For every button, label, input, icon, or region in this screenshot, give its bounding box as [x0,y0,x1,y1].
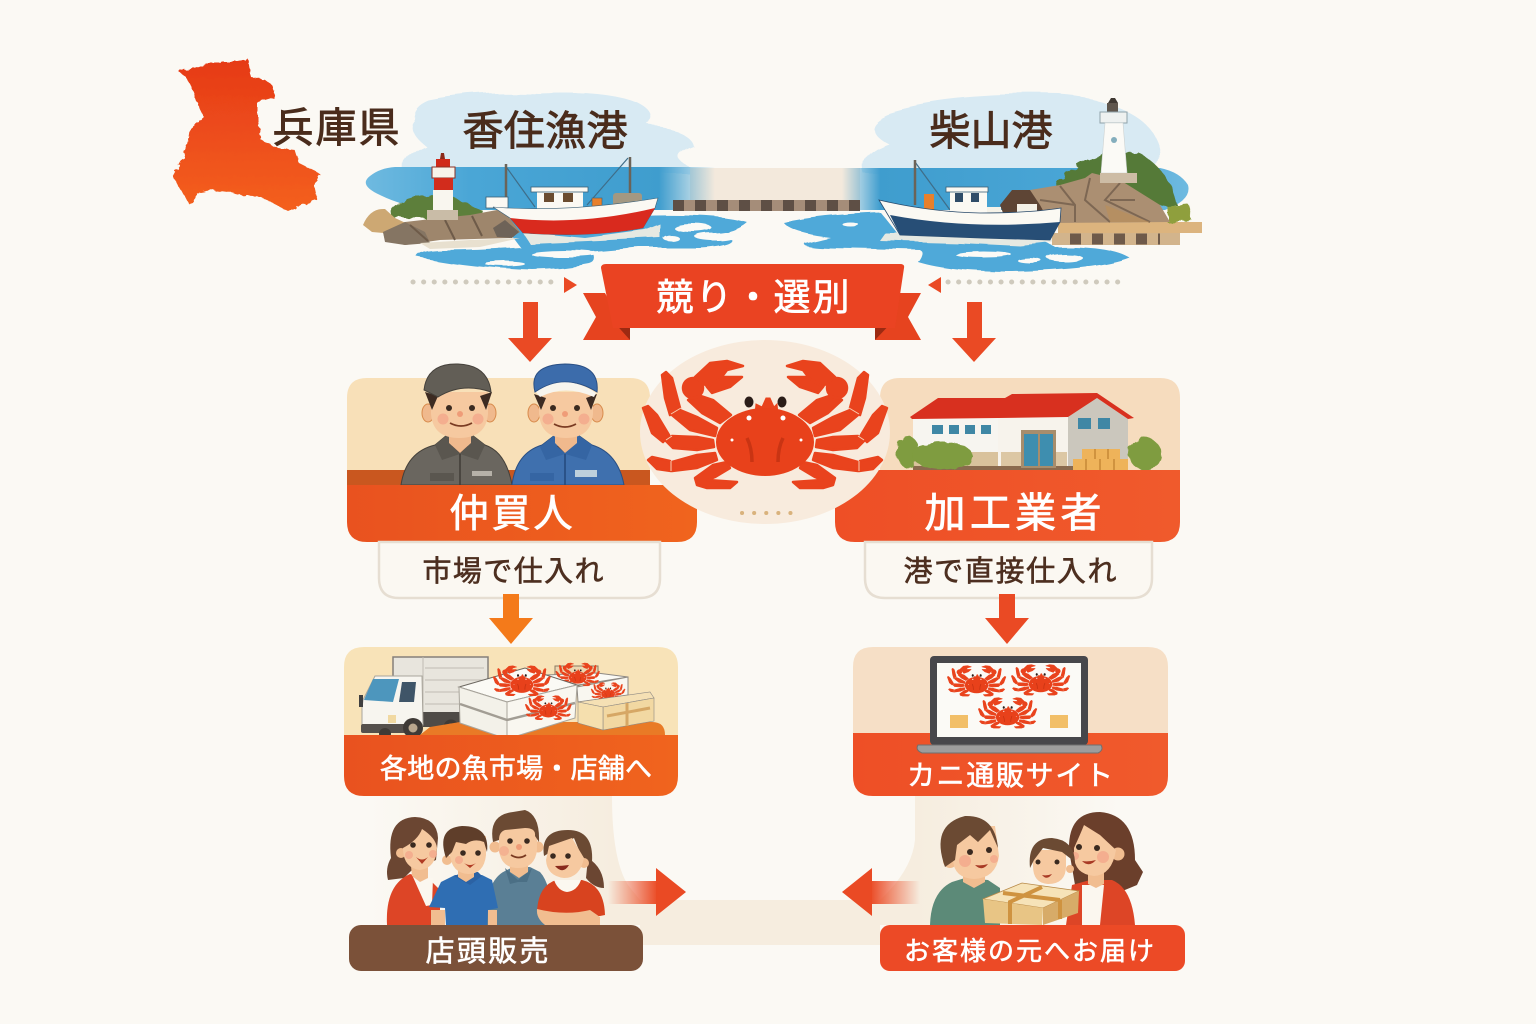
crab medallion [640,340,890,524]
breakwater [673,200,860,211]
sea right [842,168,1189,210]
note: buying at market [379,542,660,598]
lower sea left [417,215,747,270]
panel: harbour scene [363,94,1202,272]
boat left [486,157,658,235]
band dark [347,470,650,486]
store band [349,925,643,971]
lighthouse right [1100,98,1137,183]
online background [853,647,1168,733]
arrow: red down [985,594,1029,644]
broker right man [512,364,624,485]
truck [359,657,488,740]
panel: store customers [349,810,643,971]
note: buying directly at port [865,542,1152,598]
arrow: to store [608,868,686,916]
broker left man [401,364,512,485]
broker background [347,378,650,470]
crab boxes [459,663,654,739]
panel: home delivery [880,812,1185,971]
sky wash left [405,94,692,172]
woman in red top [537,830,605,925]
online band [853,733,1168,796]
lower sea right [783,212,1130,272]
map: Hyogo prefecture [173,59,400,211]
panel: online shop [853,647,1168,796]
arrow: down right [952,302,996,362]
processor band [835,470,1180,542]
rocks left [363,194,520,249]
child [1030,838,1075,884]
online label: カニ通販サイト [907,760,1113,791]
broker label: 仲買人 [450,493,572,536]
arrow: down left [508,302,552,362]
processor background [880,378,1180,470]
man in slate shirt [483,810,553,925]
rocks and dock right [1000,152,1202,245]
pointer left [928,277,941,293]
crate mat [420,722,665,735]
mother [1066,812,1143,925]
son [930,816,1000,925]
distribution label: 各地の魚市場・店舗へ [380,754,652,784]
boy in blue shirt [429,826,498,925]
distribution background [344,647,678,735]
wake left [522,224,660,244]
wake right [880,234,1068,246]
sky wash right [861,95,1158,172]
connector wash [368,796,1120,945]
distribution band [344,735,678,796]
foam [485,222,1083,266]
banner: auction and sorting [583,264,921,340]
note text: 港で直接仕入れ [904,555,1116,588]
panel: broker [347,364,697,542]
heading: Shibayama port: 柴山港 [930,108,1052,154]
sea left [366,167,715,210]
panel: processor [835,378,1180,542]
broker band [347,485,697,542]
dotted line left [413,280,558,284]
woman with dark hair [387,817,440,925]
factory [897,393,1161,470]
note text: 市場で仕入れ [422,555,604,588]
store label: 店頭販売 [426,935,548,968]
arrow: orange down [489,594,533,644]
home band [880,925,1185,971]
parcel [983,883,1079,925]
boat right [879,160,1061,240]
pier sand wash [690,168,860,210]
label: Hyogo: 兵庫県 [272,105,400,151]
dotted line right [948,280,1118,284]
banner label: 競り・選別 [656,277,850,318]
panel: distribution [344,647,678,796]
laptop [917,656,1102,753]
arrow: to home [842,868,920,916]
pointer right [564,277,577,293]
icon: crab [643,361,887,488]
processor label: 加工業者 [924,490,1102,536]
heading: Kasumi port: 香住漁港 [462,108,628,154]
home label: お客様の元へお届け [904,936,1154,966]
lighthouse left [427,153,458,220]
